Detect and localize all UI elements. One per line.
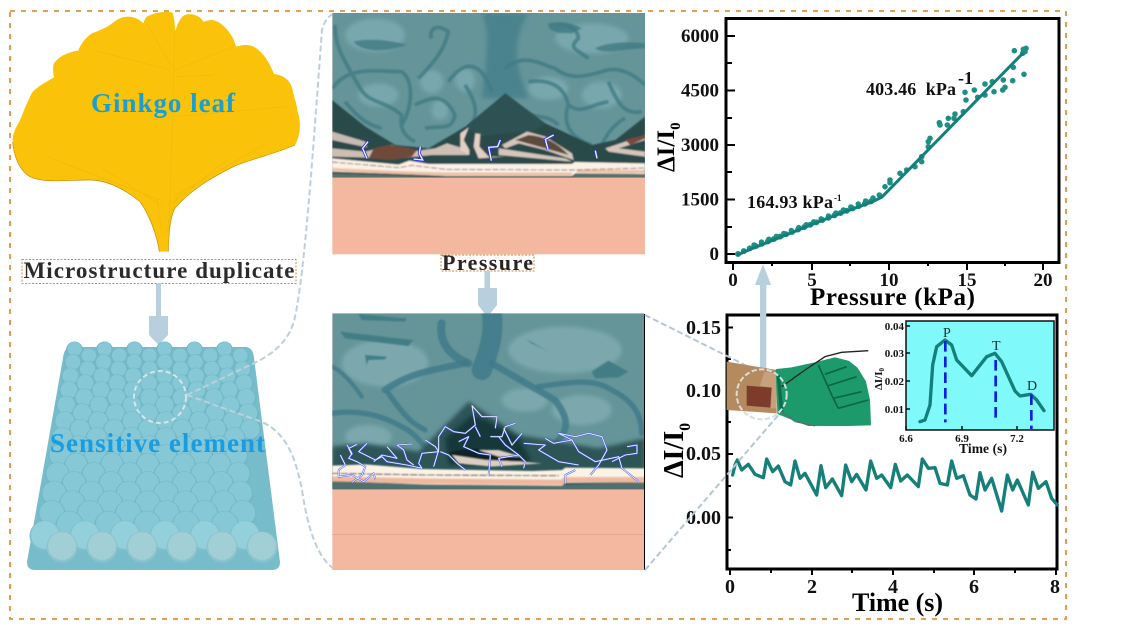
panel: compressed microstructure with conduction paths [332, 313, 645, 570]
inset y labels: 0.04 [885, 321, 904, 333]
forearm [727, 362, 777, 413]
conduction paths [339, 406, 639, 483]
photo: gloved hand with sensor [727, 351, 870, 426]
sensitive element [27, 347, 280, 570]
ball array [45, 349, 263, 547]
x tick labels: 10 [880, 270, 898, 291]
arrow: leaf to sensitive element [149, 283, 168, 345]
y tick labels: 0.00 [686, 507, 721, 529]
annotation: high-pressure sensitivity: -1 [958, 68, 973, 88]
peak labels: P [943, 326, 951, 341]
y tick labels: 3000 [681, 135, 719, 156]
glove [777, 358, 870, 425]
ginkgo leaf [13, 12, 300, 252]
inset y labels: 0.01 [885, 404, 904, 416]
x tick labels [728, 270, 1052, 291]
inset x labels: 6.6 [899, 433, 913, 445]
y axis title: ΔI/I [659, 431, 690, 478]
peak labels: D [1027, 379, 1037, 394]
scatter points [738, 46, 1029, 254]
chart: response vs pressure [653, 18, 1059, 311]
signal trace [733, 459, 1057, 511]
y tick labels: 0 [710, 244, 719, 265]
fit line [737, 53, 1023, 255]
dashed connector lines to wrist [645, 315, 787, 570]
arrow: pressure [478, 271, 497, 317]
y tick labels: 4500 [681, 80, 719, 102]
label: Microstructure duplicate: Microstructure duplicate [24, 258, 294, 283]
y axis title: 0 [668, 122, 684, 130]
annotation: high-pressure sensitivity [866, 68, 973, 99]
y axis title: ΔI/I [653, 130, 680, 172]
inset x labels: 7.2 [1010, 433, 1024, 445]
x tick labels: 5 [807, 270, 817, 291]
plot frame [726, 18, 1059, 262]
peak labels [943, 326, 1037, 394]
x tick labels: 15 [958, 270, 976, 291]
y tick labels: 6000 [681, 26, 719, 47]
label: Ginkgo leaf: Ginkgo leaf [91, 88, 236, 118]
panel: uncompressed microstructure [332, 13, 645, 254]
x tick labels [725, 576, 1060, 598]
x axis title: Time (s) [852, 588, 943, 617]
chart: response vs time [659, 315, 1060, 617]
inset plot background [906, 321, 1054, 430]
inset y labels [885, 321, 904, 416]
annotation: high-pressure sensitivity: 403.46 kPa [866, 79, 956, 99]
axis ticks [727, 328, 1056, 575]
x tick labels: 0 [725, 576, 735, 598]
inset trace and markers [920, 340, 1044, 429]
y tick labels [681, 26, 719, 265]
inset y title: 0 [878, 367, 886, 371]
annotation: low-pressure sensitivity: 164.93 kPa [747, 192, 833, 212]
inset x labels [899, 433, 1024, 445]
x tick labels: 6 [969, 576, 979, 598]
x tick labels: 0 [728, 270, 738, 291]
label: Sensitive element: Sensitive element [50, 428, 265, 458]
y tick labels [686, 317, 721, 529]
y tick labels: 0.10 [686, 380, 721, 402]
axis ticks [727, 36, 1043, 270]
inset y labels: 0.02 [885, 376, 904, 388]
x axis title: Pressure (kPa) [810, 284, 975, 311]
y tick labels: 0.05 [686, 443, 721, 465]
y axis title: 0 [677, 423, 694, 431]
inset chart: single pulse waveform [873, 321, 1054, 456]
x tick labels: 2 [807, 576, 817, 598]
dashed connector curve to top panel [187, 13, 335, 395]
sensor patch [747, 386, 772, 408]
y tick labels: 0.15 [686, 317, 721, 339]
dashed connector curve to bottom panel [187, 395, 336, 570]
y tick labels: 1500 [681, 190, 719, 210]
peak labels: T [992, 339, 1001, 354]
x tick labels: 20 [1034, 270, 1052, 291]
zoom circle on sensitive element [134, 371, 186, 423]
inset y labels: 0.03 [885, 348, 904, 360]
inset y title: ΔI/I [873, 371, 885, 390]
inset x title: Time (s) [959, 441, 1007, 456]
inset ticks [906, 326, 1017, 430]
annotation: low-pressure sensitivity: -1 [834, 193, 842, 203]
arrow: wrist signal to pressure chart [755, 264, 771, 372]
x tick labels: 4 [888, 576, 898, 598]
label: Pressure: Pressure [442, 250, 533, 275]
plot frame [727, 315, 1057, 569]
inset x labels: 6.9 [955, 433, 969, 445]
x tick labels: 8 [1050, 576, 1060, 598]
